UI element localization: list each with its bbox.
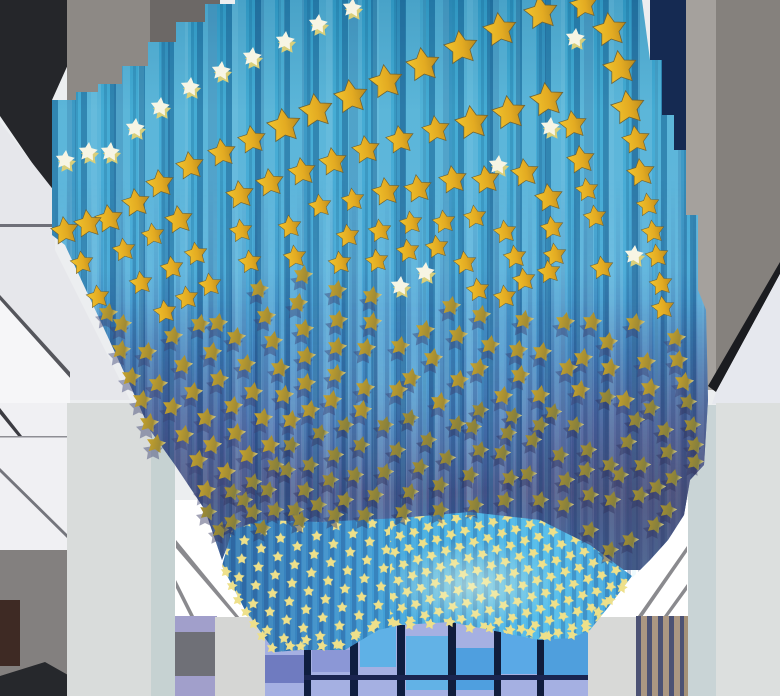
panel: slatted wall <box>636 616 688 696</box>
chandelier body <box>40 0 720 580</box>
stars: gold rows 3 to 6 <box>85 157 615 439</box>
panel: left white ceiling <box>0 122 130 400</box>
stars: lower edge of bright band <box>220 565 628 654</box>
star field: right swirl <box>390 515 628 640</box>
panel: upper right wood cladding <box>715 0 780 384</box>
stars: white top row <box>55 0 645 298</box>
stars: large gold row 1 <box>49 0 651 245</box>
star field: left swirl <box>222 519 390 652</box>
stars: gold row 2 <box>69 80 676 319</box>
light flare <box>388 544 552 626</box>
panel: center bright ceiling <box>175 500 690 620</box>
panel: upper left dark wall <box>0 0 70 192</box>
panel: lower left bay <box>175 616 217 696</box>
pillar: left rear <box>215 617 265 696</box>
chandelier lower bright band <box>222 512 632 652</box>
stars: olive rows 7 to 10 <box>143 303 695 506</box>
panel: right ceiling wedge <box>708 262 780 392</box>
stars: dim rows 11 to 15 <box>196 386 706 564</box>
panel: lower left ceiling <box>0 403 68 553</box>
pillar: right front <box>688 403 780 696</box>
panel: upper wood cladding <box>67 0 177 100</box>
pillar: right rear <box>588 617 636 696</box>
panel: center windows <box>265 620 590 696</box>
pillar: left front <box>67 403 175 696</box>
